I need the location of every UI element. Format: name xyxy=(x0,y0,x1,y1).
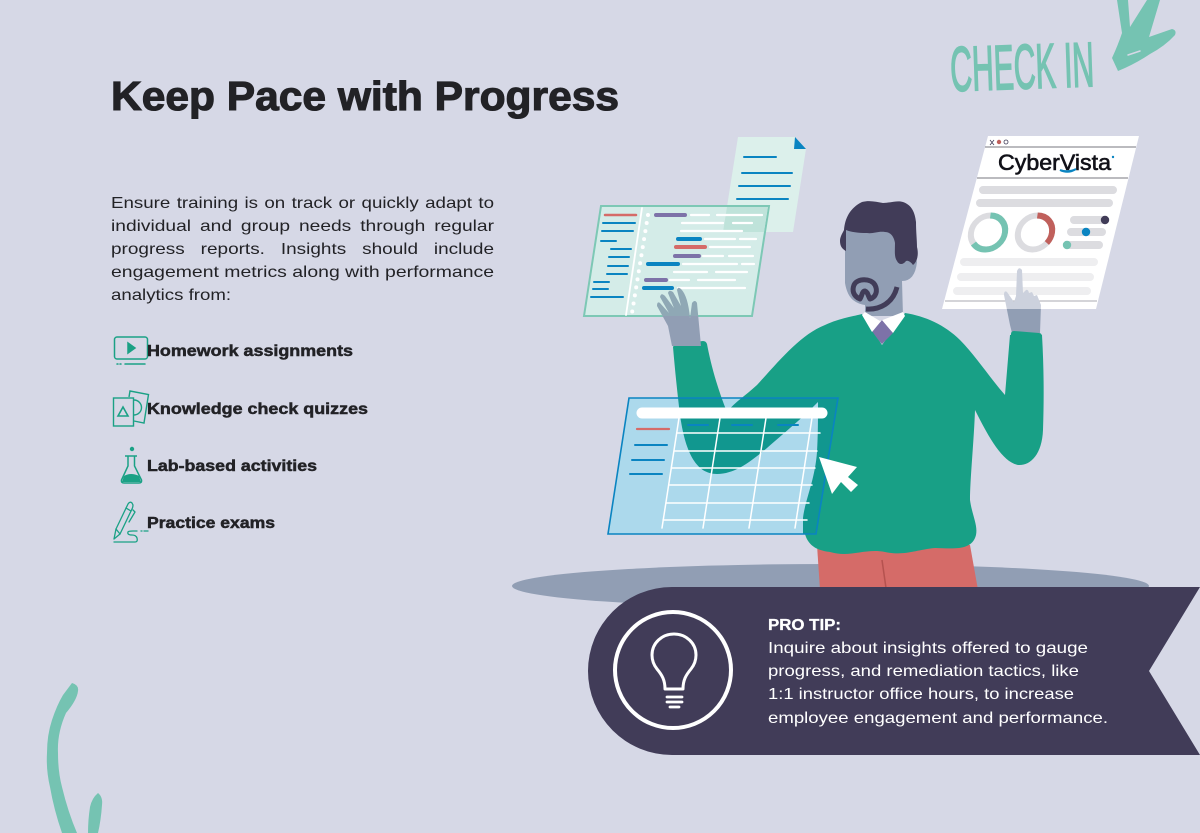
text block: intro paragraph: analytics from: xyxy=(111,287,231,304)
donut charts xyxy=(969,216,1054,250)
collar and tie xyxy=(862,312,905,344)
list: analytics sources xyxy=(114,337,368,542)
text: pro tip: PRO TIP: xyxy=(768,617,841,634)
text: pro tip: Inquire about insights offered to gauge xyxy=(768,640,1088,657)
text block: intro paragraph: Ensure training is on track or quickly adapt to xyxy=(111,195,494,212)
text block: intro paragraph: individual and group needs through regular xyxy=(111,218,495,235)
beard xyxy=(853,280,897,309)
text block: intro paragraph: engagement metrics along with performance xyxy=(111,264,494,281)
trousers xyxy=(817,545,978,590)
cursor arrow xyxy=(819,457,858,494)
report panel: CyberVista xyxy=(942,136,1139,309)
hair xyxy=(840,201,918,265)
icon: quiz cards xyxy=(114,391,148,426)
floor shadow xyxy=(512,564,1149,608)
label: homework assignments: Homework assignments xyxy=(147,343,353,360)
window controls xyxy=(990,140,1008,145)
left hand xyxy=(657,288,701,346)
logo: CyberVista xyxy=(998,150,1112,175)
icon: light bulb in circle xyxy=(615,612,731,728)
text block: intro paragraph xyxy=(111,195,495,304)
back document xyxy=(723,137,806,232)
handwritten label: check in: CHECK IN xyxy=(949,31,1095,105)
icon: pen signing xyxy=(114,502,148,542)
icon: video monitor xyxy=(114,337,148,364)
banner: pro tip xyxy=(588,587,1200,755)
code panel xyxy=(584,206,769,316)
decoration: hand-drawn strokes bottom left xyxy=(47,683,102,833)
arrow: hand-drawn pointer xyxy=(1112,0,1176,71)
illustration: man with floating screens xyxy=(584,136,1139,600)
sweater xyxy=(673,313,1044,554)
sliders xyxy=(1063,216,1109,249)
right hand pointing xyxy=(1004,268,1041,333)
text: pro tip xyxy=(768,617,1108,727)
label: knowledge check quizzes: Knowledge check quizzes xyxy=(147,401,368,418)
title: Keep Pace with Progress xyxy=(111,73,619,119)
neck and face xyxy=(845,222,917,316)
text: pro tip: progress, and remediation tactics, like xyxy=(768,663,1079,680)
text: pro tip: employee engagement and performance. xyxy=(768,710,1108,727)
text block: intro paragraph: progress reports. Insights should include xyxy=(111,241,494,258)
label: practice exams: Practice exams xyxy=(147,515,275,532)
text: pro tip: 1:1 instructor office hours, to increase xyxy=(768,686,1074,703)
right cuff xyxy=(1010,331,1042,342)
table panel xyxy=(607,397,839,535)
label: lab-based activities: Lab-based activities xyxy=(147,458,317,475)
icon: lab flask xyxy=(121,447,142,483)
